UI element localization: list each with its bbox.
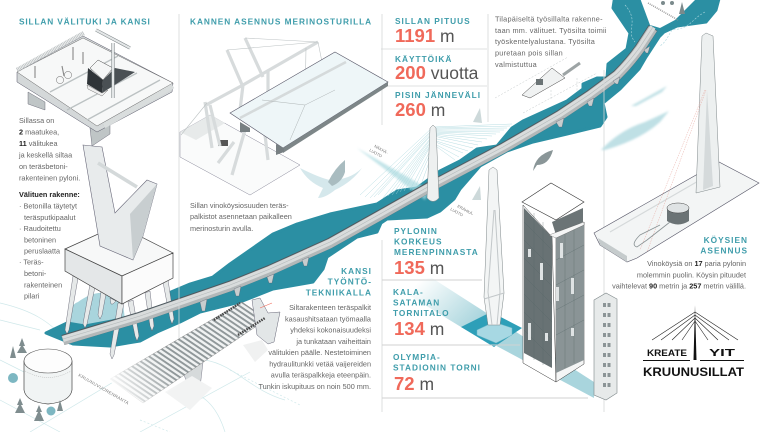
small map labels: LUOTO — [450, 207, 464, 218]
stat: olympiastadionin torni: STADIONIN TORNI — [393, 362, 481, 372]
text: välituen rakenne: · Betonilla täytetyt — [19, 202, 77, 210]
small map labels: KRUUNUVUORENRANTA — [78, 373, 130, 406]
text: siltarakenteen: yhdeksi kokonaisuudeksi — [290, 326, 371, 334]
cylinder tank — [8, 338, 72, 421]
text: välituen rakenne: pilari — [24, 292, 40, 300]
stat: pylonin korkeus: PYLONIN — [394, 226, 438, 236]
small map labels: NÄKKÄ- — [374, 144, 390, 155]
stat: käyttöikä: 200 vuotta — [395, 62, 479, 83]
sails — [472, 108, 482, 200]
stat: pisin jänneväli — [395, 90, 481, 120]
stat: pylonin korkeus: 135 m — [394, 257, 444, 278]
stat: pisin jänneväli: PISIN JÄNNEVÄLI — [395, 90, 481, 100]
Olympic stadium tower — [594, 293, 617, 400]
crane illustration — [180, 38, 388, 195]
stat: sillan pituus — [395, 16, 471, 46]
text: siltarakenteen: avulla teräspalkkeja eteenpäin. — [271, 370, 371, 380]
clouds — [601, 86, 669, 150]
logo: kruunusillat: KRUUNUSILLAT — [643, 365, 745, 379]
top-left deck illustration — [17, 30, 173, 146]
text: välituen rakenne: · Teräs- — [19, 258, 44, 266]
stat: kalasataman tornitalo: KALA- — [393, 287, 424, 297]
small map labels: LUOTO — [369, 148, 383, 159]
text: vinoköysiä: vaihtelevat 90 metrin ja 257 metrin välillä. — [612, 282, 746, 290]
text: sillassa on: 11 välitukea — [19, 139, 58, 148]
heading: kansi työntötekniikalla: TEKNIIKALLA — [306, 288, 372, 298]
top-right land and trees — [625, 0, 705, 46]
logo: kruunusillat: KREATE — [647, 348, 687, 359]
text: vinoköysiä: Vinoköysiä on 17 paria pylonin — [647, 259, 746, 268]
text: siltarakenteen: ja tunkataan vaiheittain — [295, 337, 371, 346]
lamp post — [96, 30, 130, 98]
logo: kruunusillat: YIT — [709, 348, 735, 359]
map lines — [0, 303, 300, 432]
text: sillan vinoköysiosuuden: palkistot asennetaan paikalleen — [190, 212, 292, 221]
main pylon — [427, 125, 439, 202]
stat: sillan pituus: 1191 m — [395, 25, 455, 46]
main pylon cables — [360, 124, 512, 198]
supports — [28, 92, 45, 110]
text: siltarakenteen: hydraulitunkki vetää vaijereiden — [269, 360, 371, 368]
foundation piles — [65, 276, 174, 359]
text: sillassa on: on teräsbetoni- — [19, 162, 68, 171]
stat: kalasataman tornitalo: TORNITALO — [393, 308, 450, 318]
text: välituen rakenne: teräsputkipaalut — [24, 213, 76, 222]
text: tilapäiseltä työsillalta: työskentelyalustana. Työsilta — [495, 37, 596, 46]
text: tilapäiseltä työsillalta: valmistuttua — [495, 60, 538, 69]
text: tilapäiseltä työsillalta: Tilapäiseltä työsillalta rakenne- — [495, 14, 603, 24]
bridge piers — [200, 46, 650, 311]
heading: köysien asennus: ASENNUS — [700, 246, 748, 256]
text: vinoköysiä: molemmin puolin. Köysin pituudet — [637, 270, 746, 280]
text: sillassa on: Sillassa on — [19, 116, 54, 125]
dividers — [179, 14, 604, 412]
text: siltarakenteen: Tunkin iskupituus on noin 500 mm. — [258, 382, 371, 391]
stat: käyttöikä: KÄYTTÖIKÄ — [395, 54, 452, 64]
river water — [46, 0, 720, 346]
heading: kansi työntötekniikalla: KANSI — [341, 266, 372, 276]
heading: sillan välituki ja kansi: SILLAN VÄLITUKI JA KANSI — [19, 16, 151, 26]
small map labels — [78, 144, 475, 406]
temporary work bridge — [495, 57, 597, 113]
pylon height model — [477, 167, 512, 343]
logo: kruunusillat — [643, 305, 745, 379]
tram — [87, 60, 135, 96]
Kalasatama tower — [522, 183, 584, 382]
text: välituen rakenne: betoni- — [24, 269, 47, 278]
stat: kalasataman tornitalo — [393, 287, 450, 339]
small map labels: ERÄHKÄ- — [457, 204, 475, 217]
stat: sillan pituus: SILLAN PITUUS — [395, 16, 471, 26]
text: sillassa on: ja keskellä siltaa — [18, 150, 73, 160]
cable installation illustration — [594, 33, 759, 262]
text: välituen rakenne: peruslaatta — [24, 246, 61, 256]
heading: köysien asennus: KÖYSIEN — [704, 235, 748, 245]
text: sillassa on: 2 maatukea, — [19, 128, 59, 136]
text: välituen rakenne: · Raudoitettu — [19, 224, 61, 233]
stats arrows — [382, 280, 588, 398]
text: välituen rakenne: Välituen rakenne: — [19, 190, 80, 199]
text: sillassa on: rakenteinen pyloni. — [19, 174, 80, 182]
stat: pisin jänneväli: 260 m — [395, 99, 445, 120]
heading: kannen asennus: KANNEN ASENNUS MERINOSTURILLA — [190, 16, 372, 26]
text: tilapäiseltä työsillalta: puretaan pois sillan — [495, 48, 563, 58]
people — [35, 47, 83, 84]
stat: pylonin korkeus — [394, 226, 479, 278]
stat: pylonin korkeus: MERENPINNASTA — [394, 247, 479, 257]
heading: kansi työntötekniikalla: TYÖNTÖ- — [328, 276, 372, 286]
pylon shadow reflection — [357, 148, 430, 200]
small bird — [533, 150, 553, 171]
bird — [300, 160, 362, 198]
stat: olympiastadionin torni: OLYMPIA- — [393, 352, 441, 362]
text: sillan vinoköysiosuuden: merinosturin avulla. — [190, 224, 253, 233]
stat: olympiastadionin torni: 72 m — [394, 373, 434, 394]
main bridge deck — [63, 27, 653, 340]
deck launching illustration — [105, 298, 280, 410]
text: tilapäiseltä työsillalta: taan mm. välituet. Työsilta toimii — [495, 26, 607, 35]
text: välituen rakenne: rakenteinen — [24, 280, 62, 290]
deck lane stripes — [50, 56, 167, 125]
foundation block and pylon — [65, 145, 173, 304]
light water patch — [68, 293, 125, 330]
text: välituen rakenne: betoninen — [24, 236, 56, 244]
text: siltarakenteen: kasaushitsataan työmaalla — [285, 314, 372, 324]
text: siltarakenteen: Siltarakenteen teräspalkit — [289, 303, 371, 312]
stat: kalasataman tornitalo: 134 m — [394, 318, 444, 339]
stat: pylonin korkeus: KORKEUS — [394, 236, 442, 246]
stat: olympiastadionin torni — [393, 352, 481, 394]
tower base — [461, 312, 522, 347]
stat: kalasataman tornitalo: SATAMAN — [393, 298, 440, 308]
height shadow band — [384, 278, 594, 398]
text: sillan vinoköysiosuuden: Sillan vinoköysiosuuden teräs- — [190, 201, 289, 210]
railing — [17, 33, 84, 70]
text: siltarakenteen: välitukien päälle. Nestetoiminen — [268, 348, 371, 357]
